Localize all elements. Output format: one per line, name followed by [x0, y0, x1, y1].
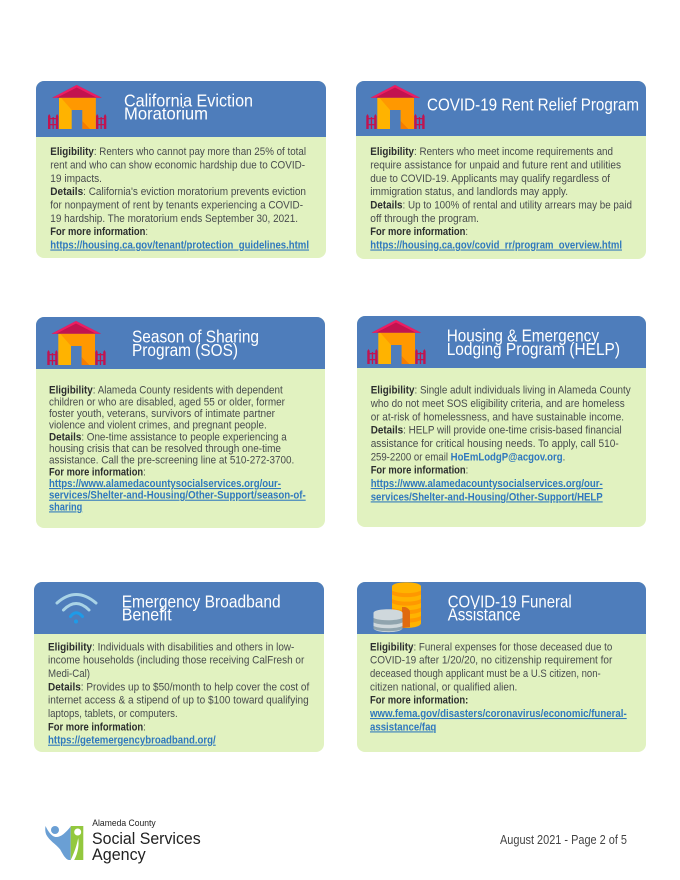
- text block: 19 impacts.: [50, 173, 102, 185]
- logo text: Social Services: [92, 830, 201, 848]
- header band: [357, 316, 646, 368]
- text block: https://www.alamedacountysocialservices.org/our-: [49, 478, 281, 490]
- logo text: Agency: [92, 846, 146, 864]
- text block: For more information:: [48, 721, 146, 733]
- text block: require assistance for unpaid and future rent and utilities: [370, 160, 621, 172]
- heading: Emergency Broadband: [122, 592, 281, 612]
- heading: COVID-19 Rent Relief Program: [427, 95, 639, 115]
- icon: wifi: [57, 594, 96, 624]
- heading: COVID-19 Funeral: [448, 592, 572, 612]
- text block: Eligibility: Single adult individuals living in Alameda County: [371, 385, 631, 397]
- text block: internet access & a stipend of up to $100 toward qualifying: [48, 695, 309, 707]
- panel: Emergency Broadband Benefit: [34, 582, 324, 752]
- text block: [48, 641, 309, 747]
- text block: deceased though applicant must be a U.S citizen, non-: [370, 668, 601, 680]
- text block: https://housing.ca.gov/covid_rr/program_overview.html: [370, 240, 622, 252]
- icon: house: [367, 320, 426, 364]
- text block: https://getemergencybroadband.org/: [48, 735, 216, 747]
- icon: house: [47, 321, 106, 365]
- logo: Alameda County Social Services Agency: [45, 818, 201, 864]
- text block: income households (including those receiving CalFresh or: [48, 655, 305, 667]
- icon: house: [48, 85, 106, 129]
- text block: www.fema.gov/disasters/coronavirus/economic/funeral-: [369, 708, 627, 720]
- text block: citizen national, or qualified alien.: [370, 681, 517, 693]
- heading: [132, 327, 259, 360]
- header band: [356, 81, 646, 136]
- heading: Season of Sharing: [132, 327, 259, 347]
- heading: Housing & Emergency: [447, 326, 599, 346]
- text block: sharing: [49, 501, 82, 513]
- text block: For more information:: [49, 466, 146, 478]
- text block: rent and who can show economic hardship due to COVID-: [50, 160, 305, 172]
- panel: Housing and Emergency Lodging Program: [357, 316, 646, 527]
- text block: Details: HELP will provide one-time crisis-based financial: [371, 425, 622, 437]
- text block: [370, 385, 631, 503]
- panel: California Eviction Moratorium: [36, 81, 326, 258]
- heading: Program (SOS): [132, 340, 238, 360]
- text block: [369, 641, 627, 733]
- footer page note: August 2021 - Page 2 of 5: [500, 832, 627, 847]
- text block: [49, 385, 306, 513]
- text block: COVID-19 after 1/20/20, no citizenship requirement for: [370, 655, 613, 667]
- text block: Details: California's eviction moratorium prevents eviction: [50, 186, 306, 198]
- text block: Eligibility: Alameda County residents with dependent: [49, 385, 283, 397]
- text block: https://housing.ca.gov/tenant/protection_guidelines.html: [50, 240, 309, 252]
- panel: COVID-19 Rent Relief Program: [356, 81, 646, 259]
- text block: services/Shelter-and-Housing/Other-Support/HELP: [371, 491, 603, 503]
- text block: foster youth, veterans, survivors of intimate partner: [49, 408, 275, 420]
- panel: COVID-19 Funeral Assistance: [357, 582, 646, 752]
- text block: [370, 146, 632, 252]
- text block: housing crisis that can be resolved through one-time: [49, 443, 281, 455]
- text block: Details: One-time assistance to people experiencing a: [49, 431, 287, 443]
- text block: Eligibility: Renters who cannot pay more than 25% of total: [50, 146, 306, 158]
- text block: who do not meet SOS eligibility criteria, and are homeless: [370, 398, 625, 410]
- header band: [36, 317, 325, 369]
- text block: assistance. Call the pre-screening line at 510-272-3700.: [49, 455, 294, 467]
- text block: 259-2200 or email HoEmLodgP@acgov.org.: [371, 451, 565, 463]
- text block: Eligibility: Renters who meet income requirements and: [370, 146, 613, 158]
- text block: or at-risk of homelessness, and have sustainable income.: [371, 411, 624, 423]
- text block: for nonpayment of rent by tenants experiencing a COVID-: [50, 200, 303, 212]
- panel: Season of Sharing Program: [36, 317, 325, 528]
- header band: [357, 582, 646, 634]
- text block: For more information:: [370, 226, 468, 238]
- text block: Eligibility: Individuals with disabilities and others in low-: [48, 641, 295, 653]
- text block: immigration status, and landlords may apply.: [370, 186, 568, 198]
- text block: due to COVID-19. Applicants may qualify regardless of: [370, 173, 610, 185]
- heading: [124, 91, 253, 124]
- text block: laptops, tablets, or computers.: [48, 708, 178, 720]
- icon: coin stacks: [374, 582, 421, 632]
- text block: services/Shelter-and-Housing/Other-Support/season-of-: [49, 490, 306, 502]
- text block: violence and violent crimes, and pregnant people.: [49, 420, 267, 432]
- text block: assistance for critical housing needs. To apply, call 510-: [371, 438, 619, 450]
- heading: [447, 326, 620, 359]
- heading: Moratorium: [124, 104, 208, 124]
- icon: house: [366, 85, 425, 129]
- logo text: Alameda County: [92, 818, 156, 829]
- heading: [122, 592, 281, 625]
- text block: For more information:: [371, 465, 468, 477]
- heading: Assistance: [448, 605, 521, 625]
- heading: Benefit: [122, 605, 172, 625]
- text block: assistance/faq: [370, 721, 436, 733]
- text block: https://www.alamedacountysocialservices.org/our-: [371, 478, 603, 490]
- text block: off through the program.: [370, 213, 479, 225]
- header band: [36, 81, 326, 137]
- heading: Lodging Program (HELP): [447, 339, 620, 359]
- heading: [448, 592, 572, 625]
- heading: California Eviction: [124, 91, 253, 111]
- text block: 19 hardship. The moratorium ends September 30, 2021.: [50, 213, 298, 225]
- text block: [50, 146, 309, 252]
- text block: For more information:: [370, 695, 468, 707]
- logo mark: [45, 826, 83, 860]
- header band: [34, 582, 324, 634]
- text block: Eligibility: Funeral expenses for those deceased due to: [370, 641, 612, 653]
- text block: Details: Provides up to $50/month to help cover the cost of: [48, 681, 309, 693]
- text block: Details: Up to 100% of rental and utility arrears may be paid: [370, 200, 632, 212]
- text block: For more information:: [50, 226, 148, 238]
- logo text: [92, 818, 201, 864]
- text block: children or who are disabled, aged 55 or older, former: [49, 396, 285, 408]
- text block: Medi-Cal): [48, 668, 90, 680]
